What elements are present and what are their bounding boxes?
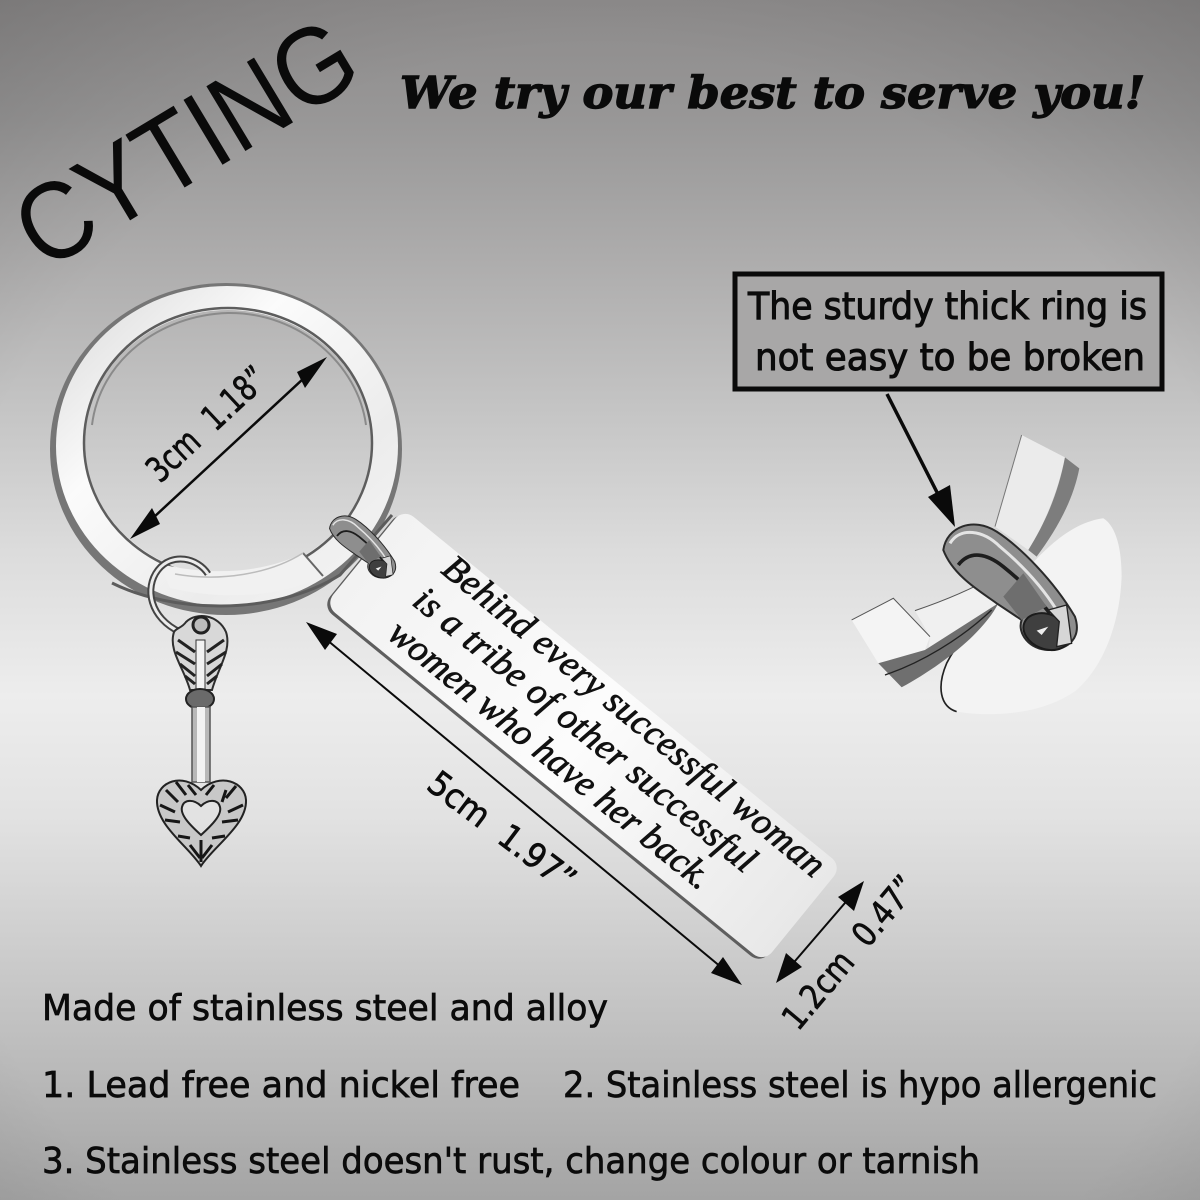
- engraved quote: Behind every successful woman: [434, 547, 834, 886]
- close-up: tag corner: [942, 518, 1122, 714]
- icon: arrow and heart charm: [151, 559, 246, 866]
- product specifications: [42, 988, 1157, 1182]
- callout: sturdy ring note: [735, 274, 1162, 389]
- ring close-up detail: [852, 435, 1122, 714]
- spec: material: Made of stainless steel and alloy: [42, 988, 608, 1029]
- engraved quote: women who have her back.: [380, 612, 720, 898]
- measurement: tag width arrow: 1.2cm 0.47”: [774, 868, 926, 1038]
- callout: sturdy ring note: not easy to be broken: [755, 336, 1145, 379]
- close-up: upper ring band: [995, 435, 1065, 550]
- callout: sturdy ring note: The sturdy thick ring is: [747, 285, 1147, 328]
- icon: split key ring: [50, 283, 402, 615]
- spec: item 1: 1. Lead free and nickel free: [42, 1065, 520, 1106]
- engraved quote: is a tribe of other successful: [405, 579, 765, 881]
- close-up: jump ring: [943, 525, 1077, 657]
- product tag: [322, 509, 842, 964]
- spec: item 2: 2. Stainless steel is hypo allergenic: [563, 1065, 1157, 1106]
- measurement: tag length arrow: 5cm 1.97”: [420, 763, 583, 901]
- slogan: We try our best to serve you!: [400, 68, 1145, 119]
- spec: item 3: 3. Stainless steel doesn't rust, change colour or tarnish: [42, 1141, 980, 1182]
- measurement: ring diameter arrow: 3cm 1.18”: [139, 359, 276, 491]
- measurement: tag length arrow: [306, 622, 742, 985]
- icon: jump ring linking tag to key ring: [330, 516, 396, 581]
- callout arrow: [887, 394, 955, 527]
- close-up: lower ring band: [852, 598, 930, 663]
- measurement: ring diameter arrow: [130, 357, 327, 539]
